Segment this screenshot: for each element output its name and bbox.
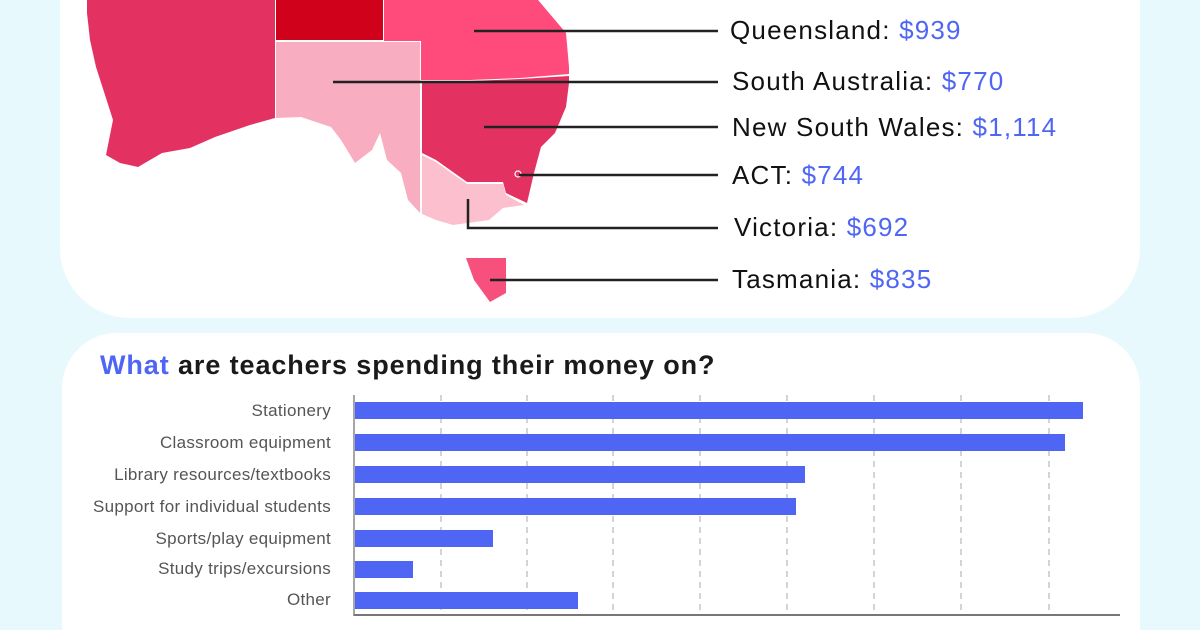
bar: Other bbox=[355, 592, 578, 609]
text: Study trips/excursions bbox=[158, 559, 331, 578]
TAS bbox=[466, 258, 506, 302]
bar: Stationery bbox=[355, 402, 1083, 419]
leader lines bbox=[333, 31, 718, 280]
ACT bbox=[515, 171, 521, 177]
label: Queensland: Queensland: $939 bbox=[730, 15, 962, 45]
bar: Classroom bbox=[355, 434, 1065, 451]
VIC bbox=[422, 155, 524, 225]
SA bbox=[276, 42, 420, 213]
text: Sports/play equipment bbox=[156, 529, 331, 548]
chart title: What are teachers spending their money on? bbox=[100, 350, 715, 380]
bar: Support bbox=[355, 498, 796, 515]
label: Victoria: Victoria: $692 bbox=[734, 212, 909, 242]
panel: spending chart bbox=[62, 333, 1140, 630]
bar: Sports bbox=[355, 530, 493, 547]
text: Library resources/textbooks bbox=[114, 465, 331, 484]
text: Support for individual students bbox=[93, 497, 331, 516]
map of Australia bbox=[87, 0, 718, 302]
NT bbox=[276, 0, 383, 40]
panel: map bbox=[60, 0, 1140, 318]
text: Other bbox=[287, 590, 331, 609]
bar: Study bbox=[355, 561, 413, 578]
label: South Australia: South Australia: $770 bbox=[732, 66, 1004, 96]
text: Classroom equipment bbox=[160, 433, 331, 452]
label: NSW: New South Wales: $1,114 bbox=[732, 112, 1057, 142]
text: Stationery bbox=[251, 401, 331, 420]
WA bbox=[87, 0, 275, 167]
label: ACT: ACT: $744 bbox=[732, 160, 864, 190]
QLD bbox=[384, 0, 569, 80]
label: Tasmania: Tasmania: $835 bbox=[732, 264, 932, 294]
category labels bbox=[93, 401, 331, 609]
NSW bbox=[422, 76, 569, 203]
bar: Library bbox=[355, 466, 805, 483]
